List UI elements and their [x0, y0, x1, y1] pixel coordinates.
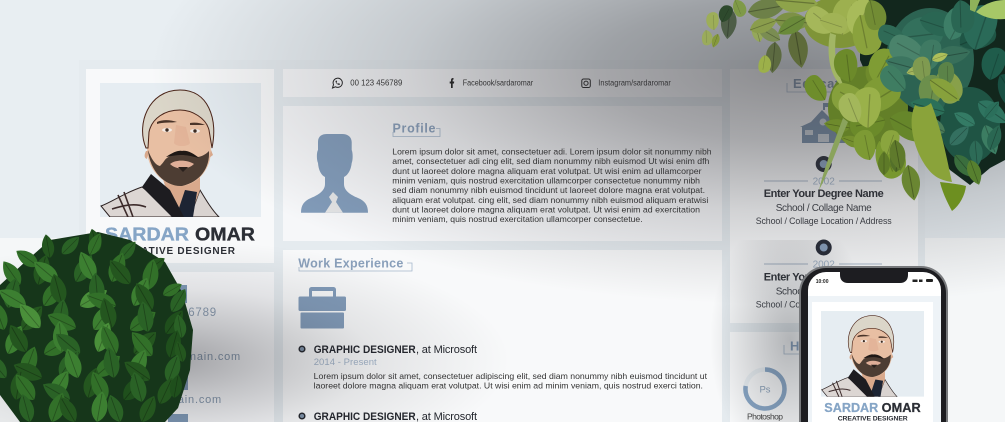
icon: mail	[172, 329, 187, 345]
profile text	[392, 146, 712, 224]
chart: photoshop ring	[745, 370, 784, 422]
education entry 2: 2002	[813, 260, 835, 270]
icon: whatsapp	[332, 78, 342, 88]
phone name: SARDAR	[824, 401, 878, 415]
profile text: sed diam nonummy nibh euismod tincidunt ut laoreet dolore magna erat volutpat.	[392, 185, 705, 195]
education entry 1	[756, 158, 892, 226]
job entry 1: 2014 - Present	[314, 357, 377, 368]
panel: education	[730, 69, 918, 323]
left sprigs	[700, 0, 819, 74]
icon: school house	[800, 103, 845, 143]
profile text: aliquam erat volutpat. cing elit, sed diam nonummy nibh euismod aliquam eratwisi	[392, 195, 708, 205]
education entry 1: 2002	[813, 176, 835, 188]
icon: person silhouette	[301, 134, 368, 213]
education entry 2: Enter Your Degree Name	[764, 272, 884, 284]
teal rosette	[875, 0, 1005, 187]
education entry 1: Enter Your Degree Name	[764, 188, 884, 200]
job entry 1: Lorem ipsum dolor sit amet, consectetuer adipiscing elit, sed diam nonummy nibh euismod tincidunt ut	[314, 371, 708, 381]
profile text: dunt ut laoreet dolore magna aliquam erat volutpat. Ut wisi enim ad ullamcorper	[392, 166, 702, 176]
phone name: OMAR	[882, 401, 921, 415]
portrait on phone	[821, 311, 924, 397]
icon: instagram	[582, 79, 590, 88]
website: yourdomain.com	[129, 394, 222, 406]
chart: photoshop ring: Ps	[759, 384, 771, 396]
instagram text: Instagram/sardaromar	[598, 79, 671, 88]
name	[105, 225, 255, 245]
icon: web	[173, 373, 188, 390]
large pointed leaves	[819, 103, 966, 211]
panel: contact details	[86, 272, 274, 422]
panel: social contact row	[283, 69, 722, 97]
heading: education: Education	[793, 76, 861, 91]
education entry 2: School / Collage Location / Address	[756, 300, 892, 310]
name: OMAR	[195, 225, 255, 245]
email: www.yourdomain.com	[118, 351, 241, 363]
education entry 2: School / Collage Name	[776, 286, 872, 298]
panel: photo and name	[86, 69, 274, 263]
plant: hanging succulents	[700, 0, 1005, 211]
notch	[840, 272, 908, 283]
job entry 1	[299, 344, 708, 390]
right lower teal leaves	[910, 98, 945, 117]
heading: profile: Profile	[392, 122, 436, 136]
icon: facebook	[450, 78, 454, 88]
plant: round bush	[0, 227, 193, 422]
icon: briefcase	[298, 287, 346, 328]
resume sheet	[79, 60, 925, 422]
phone number: 00 123 456789	[130, 307, 217, 319]
dark foliage base	[804, 0, 1005, 185]
chart: photoshop ring: Photoshop	[747, 412, 783, 422]
lime rosettes	[804, 0, 920, 200]
job entry 1: , at Microsoft	[416, 344, 477, 356]
phone screen	[808, 272, 941, 422]
phone name	[824, 401, 921, 415]
education entry 1: School / Collage Name	[776, 203, 872, 214]
top-right bright leaf	[976, 0, 1005, 19]
education entry 2	[756, 242, 892, 310]
status bar: 10:00	[816, 279, 829, 285]
job entry 1: laoreet dolore magna aliquam erat volutpat. Ut wisi enim ad minim veniam, quis nostrud exerci tation.	[314, 380, 703, 390]
profile text: Lorem ipsum dolor sit amet, consectetuer adi. Lorem ipsum dolor sit nonummy nibh	[392, 146, 712, 156]
panel: skills	[730, 332, 918, 422]
facebook text: Facebook/sardaromar	[463, 79, 534, 88]
icon: phone	[173, 285, 187, 303]
education entry 1: School / Collage Location / Address	[756, 216, 892, 226]
profile text: minim veniam, quis nostrud exercitation ullamcorper consectetue.	[392, 214, 643, 224]
portrait illustration	[100, 83, 261, 217]
job title: CREATIVE DESIGNER	[118, 246, 236, 257]
phone mockup	[799, 266, 948, 422]
panel: work experience	[283, 250, 722, 422]
panel: profile	[283, 106, 722, 241]
icon: location	[168, 414, 188, 422]
heading: work experience: Work Experience	[298, 256, 403, 270]
heading: hobbies: Hobbies	[790, 338, 845, 354]
profile text: dunt ut laoreet dolore magna aliquam erat volutpat. Ut wisi enim ad exercitation	[392, 204, 700, 214]
job entry 1: GRAPHIC DESIGNER	[314, 344, 416, 356]
status bar	[816, 279, 933, 285]
name: SARDAR	[105, 225, 189, 245]
profile text: minim veniam, quis nostrud exercitation ullamcorper consectetue nonummy nibh	[392, 176, 700, 186]
phone text: 00 123 456789	[350, 79, 403, 88]
profile text: amet, consectetuer adi cing elit, sed diam nonummy nibh euismod Ut wisi enim dfh	[392, 156, 710, 166]
job entry 2	[299, 411, 477, 422]
